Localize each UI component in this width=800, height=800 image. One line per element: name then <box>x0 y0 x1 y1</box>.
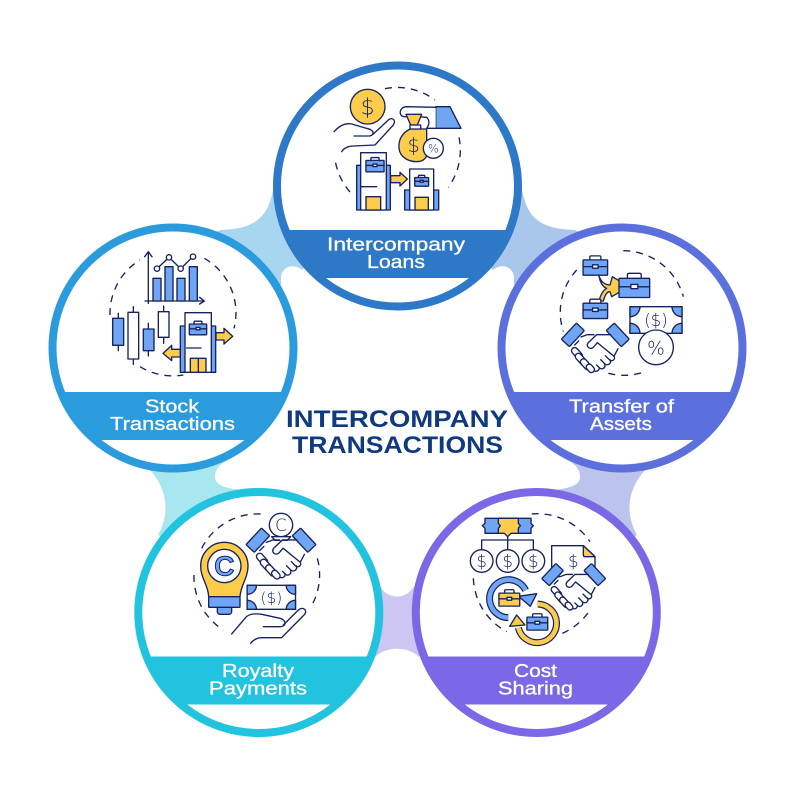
icon: royalty: C <box>275 516 287 535</box>
icon: royalty <box>194 513 320 643</box>
panel: royalty payments <box>138 492 379 733</box>
connector: royalty to cost <box>340 586 450 657</box>
label: transfer of assets <box>569 397 675 434</box>
panel: stock transactions <box>52 228 294 468</box>
icon: royalty: ($) <box>260 589 282 607</box>
icon: cost sharing: $ <box>528 552 539 571</box>
title <box>286 406 508 459</box>
label: cost sharing: Sharing <box>498 678 573 698</box>
icon: loans: % <box>428 141 439 155</box>
label: royalty payments: Payments <box>209 678 307 698</box>
title: TRANSACTIONS <box>292 432 503 459</box>
icon: cost sharing: $ <box>568 552 579 571</box>
icon: assets: % <box>647 338 665 359</box>
label: royalty payments: Royalty <box>222 661 294 681</box>
panel: intercompany loans <box>277 66 518 306</box>
icon: loans <box>334 87 461 210</box>
icon: assets <box>560 251 683 375</box>
icon: loans: $ <box>408 134 420 157</box>
connector: loans to stock <box>200 190 330 300</box>
label: royalty payments <box>209 661 307 698</box>
label: stock transactions: Transactions <box>110 414 235 434</box>
label: transfer of assets: Transfer of <box>569 397 675 417</box>
icon: cost sharing <box>470 514 606 643</box>
icon: loans: $ <box>361 95 375 120</box>
panel: transfer of assets <box>502 228 742 468</box>
icon: assets: ($) <box>644 311 668 330</box>
title: INTERCOMPANY <box>286 406 508 433</box>
connector: stock to royalty <box>148 420 260 560</box>
label: cost sharing <box>498 661 573 698</box>
icon: stock <box>110 252 236 376</box>
label: intercompany loans <box>327 234 465 272</box>
label: intercompany loans: Loans <box>367 252 425 272</box>
label: transfer of assets: Assets <box>590 414 652 434</box>
label: stock transactions: Stock <box>145 397 200 417</box>
panel: cost sharing <box>416 492 657 733</box>
connector: loans to assets <box>465 190 595 300</box>
connector: assets to cost <box>535 420 647 560</box>
icon: royalty: C <box>214 551 234 582</box>
label: intercompany loans: Intercompany <box>327 234 465 254</box>
icon: cost sharing: $ <box>502 552 513 571</box>
label: stock transactions <box>110 397 235 434</box>
icon: cost sharing: $ <box>476 552 487 571</box>
label: cost sharing: Cost <box>514 661 557 681</box>
